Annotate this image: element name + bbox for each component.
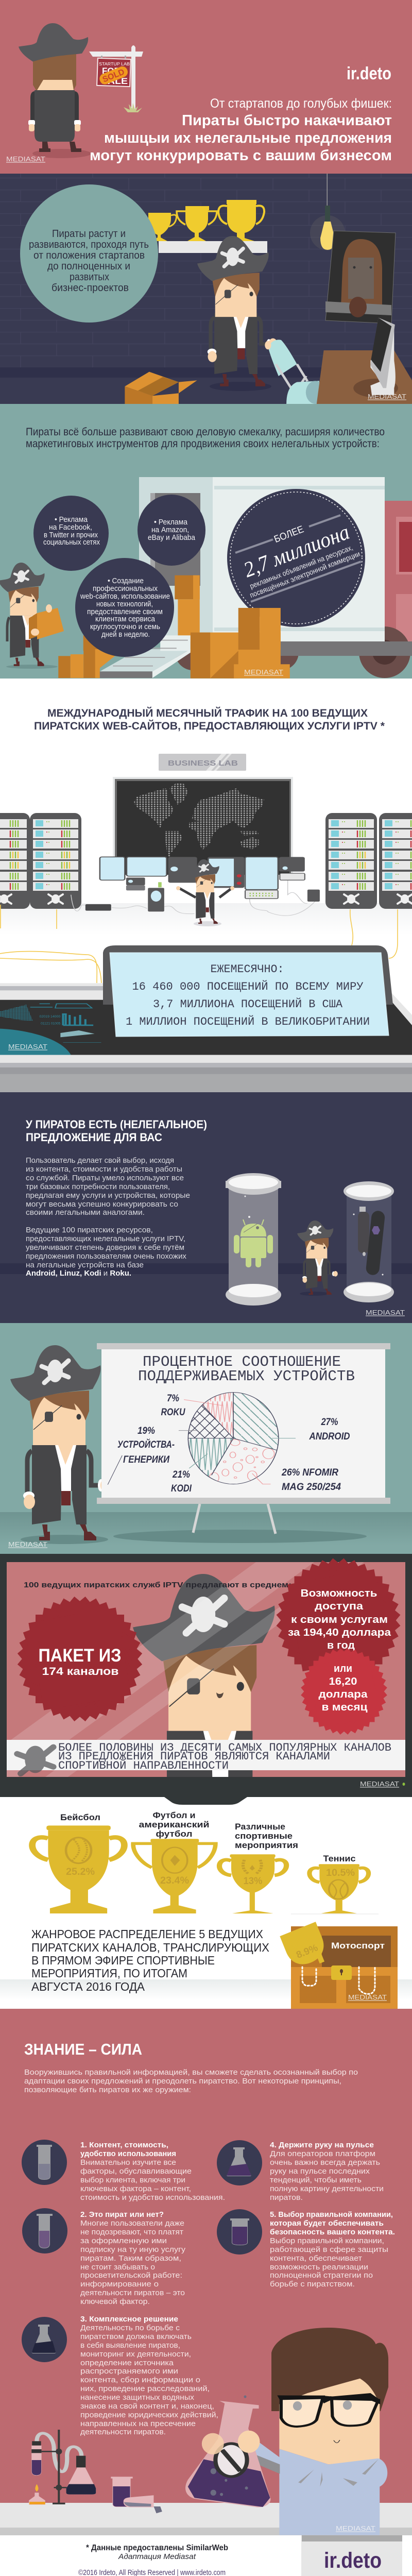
- panel: marketing tools: [0, 404, 412, 679]
- pie labels: ГЕНЕРИКИ: [123, 1454, 169, 1465]
- callout: facebook twitter ads: на Facebook,: [49, 523, 92, 532]
- callout: facebook twitter ads: в Twitter и прочих: [44, 531, 98, 539]
- illustration: lab apparatus: [29, 2430, 162, 2513]
- body text: со службой. Пираты умело используют все: [26, 1174, 184, 1182]
- illustration: cardboard box: [125, 372, 197, 404]
- watermark: mediasat: MEDIASAT: [244, 668, 283, 676]
- item 1: content cost ease: выбор клиента, включая три: [80, 2176, 185, 2184]
- pie labels: 26% NFOMIR: [281, 1467, 338, 1478]
- heading: genre distribution: В ПРЯМОМ ЭФИРЕ СПОРТИВНЫЕ: [31, 1954, 215, 1967]
- heading: ПИРАТСКИХ WEB-САЙТОВ, ПРЕДОСТАВЛЯЮЩИХ УСЛУГИ IPTV *: [34, 719, 385, 732]
- icon: power led: [403, 1783, 405, 1786]
- item 5: choose the right company: борьбе с пиратством.: [270, 2280, 355, 2289]
- callout: professional websites: дней в неделю.: [101, 631, 150, 639]
- body text: три базовых потребности пользователя,: [26, 1182, 170, 1191]
- pie labels: 7%: [167, 1393, 179, 1404]
- item 2: pirate or not: не стоит забывать о: [80, 2263, 155, 2272]
- illustration: web page mockup: [139, 477, 385, 641]
- icon: skull: [17, 1746, 54, 1774]
- stats: monthly visits monitor: ЕЖЕМЕСЯЧНО:: [210, 963, 284, 976]
- item 3: comprehensive solution: распространяемого ими: [80, 2367, 178, 2376]
- body text: увеличивают степень доверия к себе путём: [26, 1243, 184, 1252]
- logo: irdeto: ir.deto: [347, 64, 391, 83]
- illustration: for sale sign sold: FOR: [102, 66, 121, 76]
- callout: facebook twitter ads: социальных сетях: [43, 538, 100, 547]
- badge: access price per year: [277, 1558, 400, 1682]
- item 3: comprehensive solution: контента, сбор информации о: [80, 2376, 200, 2384]
- callout: pirates grow and develop: Пираты растут и: [52, 228, 126, 240]
- stat: 2.7 million ads: 2,7 миллиона: [241, 520, 353, 582]
- item 5: choose the right company: Выбор правильной компании,: [270, 2236, 384, 2245]
- item 1: content cost ease: факторы, обуславливающие: [80, 2167, 192, 2176]
- stats: monthly visits monitor: 3,7 МИЛЛИОНА ПОСЕЩЕНИЙ В США: [153, 997, 343, 1011]
- badge: price per month: или: [334, 1663, 352, 1674]
- body text: своими легальными аналогами.: [26, 1208, 145, 1217]
- trophy: various sports: 13%: [243, 1876, 263, 1887]
- item 4: finger on the pulse: руку на пульсе последних: [270, 2167, 370, 2176]
- watermark: mediasat: MEDIASAT: [366, 1309, 405, 1316]
- watermark: mediasat: MEDIASAT: [336, 2524, 375, 2532]
- illustration: world map screen: [113, 777, 293, 875]
- sign: business lab: BUSINESS LAB: [168, 759, 238, 768]
- panel: illegal offer: [0, 1092, 412, 1323]
- badge: access price per year: доступа: [315, 1601, 364, 1612]
- pie labels: ANDROID: [309, 1431, 350, 1442]
- item 3: comprehensive solution: направленных на пресечение: [80, 2419, 196, 2428]
- item 2: pirate or not: деятельности пиратов – это: [80, 2289, 185, 2297]
- watermark: mediasat: MEDIASAT: [8, 1540, 47, 1548]
- intro text: Вооружившись правильной информацией, вы сможете сделать осознанный выбор по: [24, 2068, 358, 2077]
- illustration: control console: 01121 01005: [41, 1021, 61, 1025]
- chart title: [138, 1353, 355, 1385]
- item 2: pirate or not: не подозревают, что платят: [80, 2228, 183, 2236]
- flipchart: [97, 1343, 390, 1534]
- intro text: адаптации своих предложений и преодолеть пиратство. Вот некоторые принципы,: [24, 2077, 341, 2086]
- lab counter: [0, 2503, 412, 2535]
- watermark: mediasat: MEDIASAT: [368, 393, 406, 400]
- callout: amazon ebay ads: на Amazon,: [151, 526, 189, 534]
- item 5: choose the right company: которая будет обеспечивать: [270, 2219, 384, 2228]
- illustration: treasure chest motorsport: 8.9%: [295, 1942, 319, 1961]
- item 5: choose the right company: [217, 2209, 395, 2289]
- item 5: choose the right company: контента, обеспечивает: [270, 2254, 362, 2263]
- illustration: devices and cables: [71, 857, 320, 916]
- trophy: baseball: 25.2%: [66, 1867, 95, 1877]
- icon: erlenmeyer flask: [22, 2317, 67, 2362]
- callout: pirates grow and develop: бизнес-проектов: [52, 282, 129, 294]
- illustration: for sale sign sold: SOLD: [101, 67, 126, 84]
- logo box: irdeto: [301, 2535, 402, 2576]
- item 4: finger on the pulse: полную картину деятельности: [270, 2184, 384, 2193]
- illustration: trophy shelf: [148, 200, 267, 253]
- callout: professional websites: профессиональных: [93, 585, 158, 593]
- illustration: server racks left: [0, 813, 81, 909]
- trophy: baseball: [32, 1812, 124, 1913]
- trophy: football: Футбол и: [152, 1810, 196, 1820]
- item 5: choose the right company: безопасность вашего контента.: [270, 2228, 395, 2236]
- title: мышцыи их нелегальные предложения: [104, 130, 392, 146]
- watermark: mediasat: MEDIASAT: [360, 1780, 399, 1788]
- panel: pirates grow: [0, 174, 412, 404]
- pie labels: MAG 250/254: [282, 1482, 341, 1493]
- illustration: for sale sign sold: [89, 45, 143, 112]
- body text: Ведущие 100 пиратских ресурсов,: [26, 1226, 153, 1234]
- item 2: pirate or not: пиратам. Таким образом,: [80, 2254, 181, 2263]
- item 4: finger on the pulse: очень важно всегда держать: [270, 2158, 380, 2167]
- pie labels: УСТРОЙСТВА-: [117, 1439, 175, 1450]
- chart title: ПОДДЕРЖИВАЕМЫХ УСТРОЙСТВ: [138, 1367, 355, 1385]
- callout: pirates grow and develop: развитых: [70, 272, 109, 283]
- pie labels: 27%: [321, 1417, 338, 1428]
- intro text: [26, 426, 385, 450]
- badge: access price per year: Возможность: [301, 1588, 377, 1599]
- illustration: desk with computer: [317, 318, 412, 404]
- intro text: [24, 2068, 358, 2094]
- callout: pirates grow and develop: до полноценных и: [47, 261, 130, 272]
- trophy: various sports: мероприятия: [235, 1840, 298, 1850]
- item 3: comprehensive solution: мониторинг их деятельности,: [80, 2350, 191, 2359]
- item 1: content cost ease: удобство использования: [80, 2149, 176, 2158]
- callout: pirates grow and develop: развиваются, проходя путь: [29, 239, 149, 250]
- callout: amazon ebay ads: [138, 495, 205, 566]
- badge: access price per year: в год: [327, 1640, 355, 1651]
- item 1: content cost ease: стоимость и удобство использования.: [80, 2193, 225, 2202]
- callout: professional websites: круглосуточно и семь: [90, 623, 160, 631]
- body text: из контента, стоимости и удобства работы: [26, 1165, 182, 1174]
- illustration: usb stick in tube: [344, 1181, 394, 1302]
- illustration: captain poster: [325, 231, 396, 324]
- badge: package of 174 channels: [18, 1597, 142, 1721]
- pie labels: 19%: [138, 1426, 155, 1436]
- illustration: for sale sign sold: SALE: [101, 76, 128, 86]
- item 4: finger on the pulse: [217, 2140, 384, 2202]
- body text: [26, 1156, 190, 1278]
- item 3: comprehensive solution: пиратством должна включать: [80, 2332, 192, 2341]
- callout: pirates grow and develop: [20, 184, 158, 323]
- callout: professional websites: предоставление своим: [87, 608, 163, 616]
- heading: У ПИРАТОВ ЕСТЬ (НЕЛЕГАЛЬНОЕ): [26, 1118, 207, 1131]
- illustration: large pirate on screen: [7, 1562, 364, 1777]
- intro text: позволяющие бить пиратов их же оружием:: [24, 2086, 191, 2094]
- heading: genre distribution: ЖАНРОВОЕ РАСПРЕДЕЛЕНИЕ 5 ВЕДУЩИХ: [31, 1927, 263, 1941]
- chart title: ПРОЦЕНТНОЕ СООТНОШЕНИЕ: [143, 1353, 341, 1370]
- heading: ЗНАНИЕ – СИЛА: [24, 2040, 142, 2058]
- banner: sports channels: [7, 1740, 405, 1774]
- item 5: choose the right company: полноценной стратегии по: [270, 2271, 373, 2280]
- item 1: content cost ease: 1. Контент, стоимость,: [80, 2141, 168, 2149]
- illustration: treasure chest motorsport: Мотоспорт: [331, 1941, 385, 1951]
- illustration: victorious pirate: [176, 859, 234, 926]
- illustration: server racks right: [325, 813, 412, 909]
- icon: flask: [217, 2140, 262, 2185]
- pie labels: [117, 1393, 350, 1494]
- callout: professional websites: • Создание: [108, 577, 144, 585]
- item 3: comprehensive solution: нанесение защитных водяных: [80, 2393, 195, 2402]
- illustration: for sale sign sold: STARTUP LAB: [99, 62, 130, 66]
- callout: pirates grow and develop: от положения стартапов: [33, 250, 145, 261]
- illustration: control console: 02019 14000: [40, 1014, 61, 1019]
- icon: graduated cylinder: [22, 2140, 67, 2185]
- trophy: football: футбол: [156, 1829, 193, 1839]
- panel: tv pricing: [0, 1554, 412, 1805]
- item 3: comprehensive solution: определение источника: [80, 2359, 174, 2367]
- item 3: comprehensive solution: в себя выявление пиратов,: [80, 2341, 180, 2350]
- watermark: mediasat: MEDIASAT: [8, 1043, 47, 1050]
- item 2: pirate or not: Многие пользователи даже: [80, 2219, 184, 2228]
- item 3: comprehensive solution: проведение юридических действий,: [80, 2411, 218, 2419]
- trophy: various sports: Различные: [235, 1822, 285, 1832]
- illustration: yellow cables: [0, 905, 398, 983]
- sign: business lab: [159, 754, 246, 771]
- stat: 2.7 million ads: [227, 489, 365, 627]
- trophy: baseball: Бейсбол: [60, 1812, 100, 1822]
- illustration: pirate between tubes: [297, 1221, 338, 1296]
- item 2: pirate or not: информирование о: [80, 2280, 159, 2289]
- banner: sports channels: СПОРТИВНОЙ НАПРАВЛЕННОСТИ: [58, 1759, 229, 1772]
- item 2: pirate or not: ключевой фактор.: [80, 2297, 150, 2306]
- item 2: pirate or not: [22, 2208, 186, 2306]
- intro text: Пираты всё больше развивают свою деловую смекалку, расширяя количество: [26, 426, 385, 438]
- heading: genre distribution: [31, 1927, 269, 1993]
- body text: Android, Linuz, Kodi и Roku.: [26, 1269, 131, 1278]
- badge: package of 174 channels: 174 каналов: [42, 1666, 119, 1677]
- watermark: mediasat: MEDIASAT: [6, 155, 45, 163]
- item 2: pirate or not: подписку на ту иную услугу: [80, 2245, 186, 2254]
- tv stand: [164, 1797, 247, 1805]
- floor: [0, 903, 412, 935]
- item 3: comprehensive solution: 3. Комплексное решение: [80, 2315, 178, 2324]
- title: Пираты быстро накачивают: [182, 112, 392, 129]
- badge: package of 174 channels: ПАКЕТ ИЗ: [38, 1646, 122, 1666]
- callout: facebook twitter ads: [33, 496, 109, 571]
- panel: supported devices: [0, 1323, 412, 1554]
- illustration: pirate holding box: [0, 563, 64, 669]
- callout: professional websites: [75, 558, 174, 657]
- body text: на легальные устройств на базе: [26, 1261, 144, 1269]
- heading: [34, 706, 385, 732]
- trophy: various sports: спортивные: [235, 1831, 293, 1841]
- source note: * Данные предоставлены SimilarWeb: [86, 2544, 228, 2552]
- heading: ПРЕДЛОЖЕНИЕ ДЛЯ ВАС: [26, 1131, 162, 1144]
- illustration: truck wheels and building: [175, 501, 412, 678]
- heading: genre distribution: ПИРАТСКИХ КАНАЛОВ, ТРАНСЛИРУЮЩИХ: [31, 1941, 269, 1954]
- item 4: finger on the pulse: пиратов.: [270, 2193, 303, 2202]
- callout: professional websites: новых технологий,: [96, 600, 153, 608]
- callout: professional websites: web-сайтов, использование: [80, 592, 170, 601]
- item 2: pirate or not: 2. Это пират или нет?: [80, 2210, 164, 2219]
- panel: footer: [0, 2535, 412, 2576]
- badge: price per month: доллара: [318, 1689, 368, 1700]
- illustration: pirate presenter: [10, 1345, 112, 1544]
- body text: могут весьма успешно конкурировать со: [26, 1200, 178, 1209]
- pie chart: [108, 1391, 296, 1485]
- item 1: content cost ease: [22, 2140, 225, 2202]
- heading: genre distribution: АВГУСТА 2016 ГОДА: [31, 1980, 145, 1993]
- illustration: flipchart shadow: [113, 1530, 367, 1543]
- stats: monthly visits monitor: 1 МИЛЛИОН ПОСЕЩЕНИЙ В ВЕЛИКОБРИТАНИИ: [126, 1015, 370, 1028]
- banner: sports channels: БОЛЕЕ ПОЛОВИНЫ ИЗ ДЕСЯТИ САМЫХ ПОПУЛЯРНЫХ КАНАЛОВ: [58, 1741, 391, 1754]
- item 2: pirate or not: просветительской работе:: [80, 2271, 182, 2280]
- badge: access price per year: к своим услугам: [291, 1614, 388, 1625]
- pie labels: KODI: [171, 1483, 192, 1494]
- illustration: control console: [0, 983, 412, 1092]
- item 4: finger on the pulse: тенденций, чтобы иметь: [270, 2176, 362, 2184]
- trophy: tennis: 10.5%: [326, 1868, 355, 1878]
- illustration: lamp: [310, 174, 345, 250]
- trophy: tennis: Теннис: [323, 1854, 355, 1863]
- badge: price per month: [301, 1648, 387, 1735]
- heading: genre distribution: МЕРОПРИЯТИЯ, ПО ИТОГАМ: [31, 1967, 187, 1980]
- illustration: android in tube: [226, 1173, 281, 1306]
- illustration: pirate with chair box: [197, 236, 278, 391]
- trophy: tennis: [291, 1854, 379, 1914]
- panel: monthly traffic: [0, 679, 412, 1092]
- item 5: choose the right company: возможность реализации: [270, 2263, 368, 2272]
- illustration: pirate seen from behind: [19, 23, 91, 158]
- item 5: choose the right company: 5. Выбор правильной компании,: [270, 2210, 393, 2219]
- badge: access price per year: за 194,40 доллара: [288, 1627, 391, 1638]
- body text: предлагая ему услуги и устройства, которые: [26, 1191, 190, 1200]
- panel: sport genres: [0, 1810, 412, 2009]
- stats: monthly visits monitor: 16 460 000 ПОСЕЩЕНИЙ ПО ВСЕМУ МИРУ: [132, 980, 364, 993]
- heading: МЕЖДУНАРОДНЫЙ МЕСЯЧНЫЙ ТРАФИК НА 100 ВЕДУЩИХ: [47, 706, 368, 719]
- illustration: treasure chest motorsport: [280, 1922, 398, 2009]
- item 5: choose the right company: работающей в сфере защиты: [270, 2245, 388, 2254]
- logo box: irdeto: ir.deto: [324, 2548, 382, 2573]
- stat: 2.7 million ads: рекламных объявлений на ресурсах,: [249, 544, 354, 591]
- title: могут конкурировать с вашим бизнесом: [90, 147, 392, 164]
- body text: предложения пользователям очень похожих: [26, 1252, 186, 1261]
- callout: amazon ebay ads: • Реклама: [154, 518, 188, 527]
- icon: test tube: [22, 2208, 67, 2253]
- stat: 2.7 million ads: посвящённых электронной коммерции: [249, 550, 362, 600]
- trophy: football: [133, 1810, 215, 1913]
- watermark: mediasat: MEDIASAT: [348, 1993, 387, 2001]
- item 1: content cost ease: ключевых фактора – контент,: [80, 2184, 191, 2193]
- illustration: cloud haze: [0, 1979, 412, 2000]
- heading: [26, 1118, 207, 1144]
- body text: Пользователь делает свой выбор, исходя: [26, 1156, 174, 1165]
- intro line: 100 ведущих пиратских служб IPTV предлагают в среднем:: [24, 1581, 291, 1589]
- stat: 2.7 million ads: БОЛЕЕ: [272, 524, 305, 545]
- adaptation credit: Адаптация Mediasat: [118, 2552, 196, 2561]
- item 3: comprehensive solution: деятельности пиратов.: [80, 2428, 166, 2436]
- trophy: football: американский: [139, 1820, 209, 1829]
- illustration: folding chair: [265, 340, 325, 404]
- illustration: boxes and books: [58, 575, 290, 679]
- badge: price per month: в месяц: [321, 1702, 368, 1713]
- icon: beaker: [217, 2209, 262, 2255]
- title: [90, 112, 392, 164]
- trophy: various sports: [219, 1822, 298, 1913]
- item 3: comprehensive solution: Деятельность по борьбе с: [80, 2324, 180, 2332]
- banner: sports channels: ИЗ ПРЕДЛОЖЕНИЯ ПИРАТОВ ЯВЛЯЮТСЯ КАНАЛАМИ: [58, 1750, 330, 1763]
- item 1: content cost ease: Внимательно изучите все: [80, 2158, 176, 2167]
- item 4: finger on the pulse: Для операторов платформ: [270, 2149, 375, 2158]
- item 4: finger on the pulse: 4. Держите руку на пульсе: [270, 2141, 374, 2149]
- callout: professional websites: клиентам сервиса: [95, 615, 156, 623]
- badge: price per month: 16,20: [329, 1676, 357, 1687]
- item 3: comprehensive solution: [22, 2315, 218, 2436]
- callout: facebook twitter ads: • Реклама: [55, 516, 88, 524]
- item 2: pirate or not: за оформленную ими: [80, 2236, 167, 2245]
- illustration: scientist with flask: [185, 2328, 388, 2535]
- panel: header: [0, 0, 412, 174]
- item 3: comprehensive solution: них, проведение расследований,: [80, 2384, 210, 2393]
- trophy: football: 23.4%: [160, 1875, 189, 1886]
- subtitle: from startups to blue chips: От стартапов до голубых фишек:: [210, 96, 392, 111]
- stats: monthly visits monitor: [103, 945, 393, 1037]
- intro text: маркетинговых инструментов для продвижения своих нелегальных устройств:: [26, 438, 380, 450]
- pie labels: 21%: [172, 1469, 190, 1480]
- callout: amazon ebay ads: eBay и Alibaba: [148, 534, 196, 542]
- item 3: comprehensive solution: знаков на свой контент и, наконец,: [80, 2402, 214, 2411]
- pie labels: ROKU: [161, 1407, 186, 1418]
- body text: предоставляющих нелегальные услуги IPTV,: [26, 1234, 185, 1243]
- panel: knowledge is power: [0, 2009, 412, 2535]
